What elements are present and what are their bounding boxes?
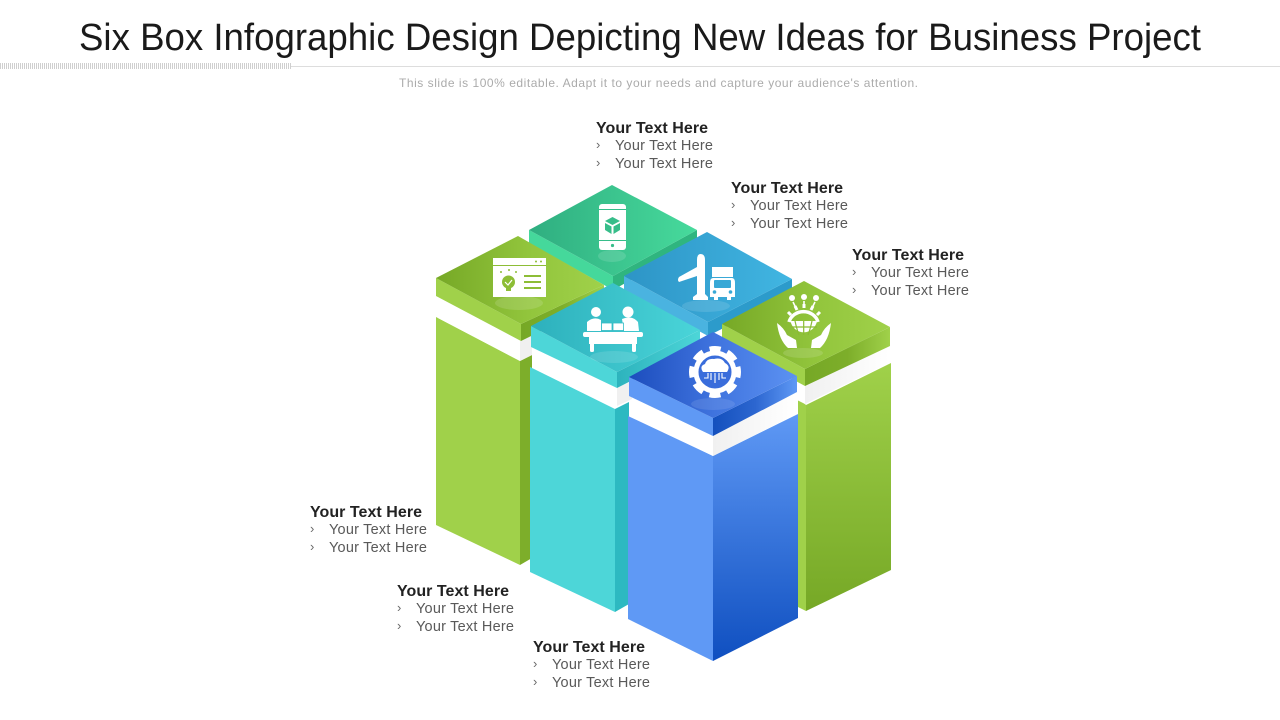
text block: left lime box (310, 504, 427, 556)
white band (438, 296, 532, 361)
text block: blue box (533, 639, 650, 691)
text block: sky blue box: Your Text Here (750, 198, 848, 214)
text block: teal box: Your Text Here (416, 619, 514, 635)
box: lime green with browser idea icon (436, 236, 604, 565)
icon: gear with cloud (692, 349, 738, 395)
text block: teal box: Your Text Here (416, 601, 514, 617)
text block: sky blue box: › (731, 215, 735, 230)
text block: sky blue box: Your Text Here (750, 216, 848, 232)
text block: blue box: › (533, 656, 537, 671)
text block: top emerald box (596, 120, 713, 172)
text block: left lime box: › (310, 539, 314, 554)
text block: sky blue box: Your Text Here (731, 180, 843, 197)
subtitle: This slide is 100% editable. Adapt it to your needs and capture your audience's attention. (399, 76, 918, 90)
body (628, 414, 798, 661)
body (436, 317, 532, 565)
text block: right lime box: Your Text Here (871, 265, 969, 281)
text block: left lime box: Your Text Here (329, 540, 427, 556)
body (530, 367, 629, 612)
icon: hands holding globe and gear (777, 294, 831, 348)
box: teal with office desk icon (530, 283, 700, 612)
text block: top emerald box: Your Text Here (615, 156, 713, 172)
text block: left lime box: Your Text Here (329, 522, 427, 538)
text block: left lime box: Your Text Here (310, 504, 422, 521)
box: emerald green with phone icon (529, 185, 697, 290)
icon: airplane and truck (678, 254, 735, 300)
text block: top emerald box: Your Text Here (615, 138, 713, 154)
white band (797, 346, 889, 404)
box: blue with cloud gear icon (628, 332, 798, 661)
white band (632, 392, 796, 456)
text block: right lime box (852, 247, 969, 299)
text block: teal box: › (397, 600, 401, 615)
text block: blue box: Your Text Here (533, 639, 645, 656)
icon: browser window with light bulb (493, 258, 546, 297)
text block: blue box: › (533, 674, 537, 689)
box: sky blue with plane and truck icon (624, 232, 792, 336)
text block: teal box (397, 583, 514, 635)
icon: two people at desk (583, 306, 643, 352)
text block: right lime box: Your Text Here (852, 247, 964, 264)
text block: right lime box: Your Text Here (871, 283, 969, 299)
text block: top emerald box: › (596, 155, 600, 170)
text block: right lime box: › (852, 264, 856, 279)
text block: blue box: Your Text Here (552, 675, 650, 691)
icon: smartphone with cube (599, 204, 626, 250)
text block: top emerald box: Your Text Here (596, 120, 708, 137)
text block: sky blue box: › (731, 197, 735, 212)
airplane (678, 254, 708, 300)
truck (712, 267, 733, 277)
text block: right lime box: › (852, 282, 856, 297)
title: Six Box Infographic Design Depicting New Ideas for Business Project (79, 17, 1201, 59)
text block: teal box: › (397, 618, 401, 633)
header rule (0, 63, 1280, 69)
text block: top emerald box: › (596, 137, 600, 152)
box: lime green with hands and globe icon (722, 281, 891, 611)
white band (533, 347, 632, 406)
text block: teal box: Your Text Here (397, 583, 509, 600)
text block: sky blue box (731, 180, 848, 232)
text block: blue box: Your Text Here (552, 657, 650, 673)
text block: left lime box: › (310, 521, 314, 536)
body (798, 363, 891, 611)
